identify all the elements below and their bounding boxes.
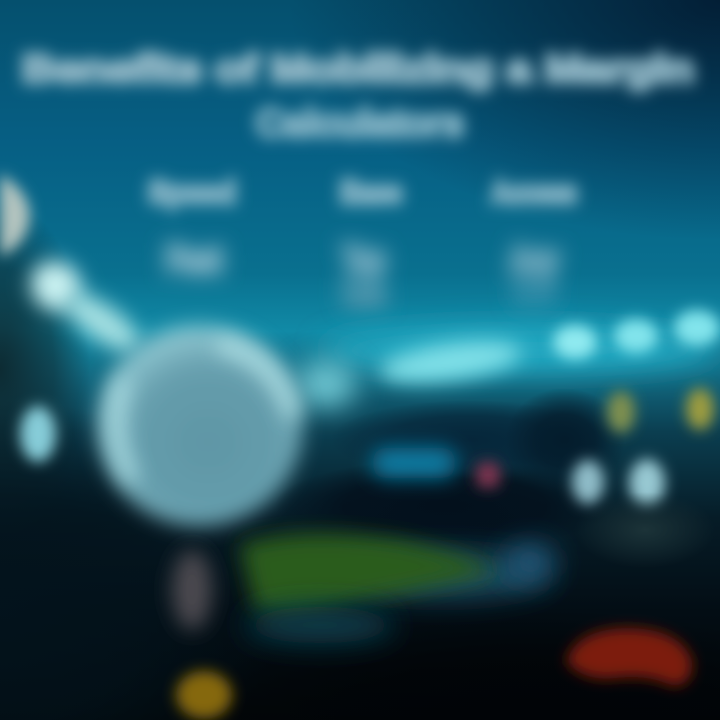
yellow ball [176,671,232,719]
red shape [566,628,692,686]
column values: Tap [342,239,386,281]
paired white lights [572,459,715,568]
light beam: left stadium lights [0,174,148,361]
column headings: Access [491,174,577,210]
column headings: Speed [148,174,236,210]
title: Benefits of Mobilizing a Margin [22,48,694,91]
large ball [98,326,302,526]
scoreboard: blue panel [372,448,456,478]
scoreboard: red mark [476,462,500,488]
column values [166,239,559,314]
grey player figure [172,550,212,630]
stadium stand: dark silhouette [275,388,625,551]
light band: right stadium lights [296,310,720,408]
left glowing dot [20,406,56,462]
title [22,48,694,145]
column values: Go [512,273,556,314]
column headings: Ease [340,174,402,210]
column values: Fast [166,239,222,281]
title: Calculators [256,102,464,145]
column values: Use [342,273,386,314]
yellow lights [607,388,714,433]
column values: Any [509,239,559,281]
column headings [148,174,577,210]
green pitch [240,534,556,643]
